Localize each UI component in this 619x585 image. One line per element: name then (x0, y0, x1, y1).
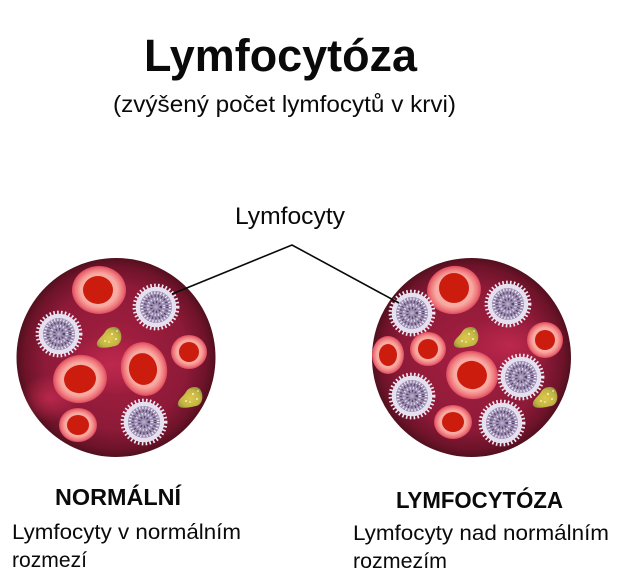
platelet (178, 387, 202, 408)
red blood cell (434, 405, 472, 439)
heading: normal: NORMÁLNÍ (55, 483, 182, 510)
lymphocyte (500, 356, 542, 398)
lymphocyte (135, 286, 177, 328)
red blood cell (171, 335, 207, 369)
red blood cell (116, 338, 172, 400)
pointer lines to lymphocytes (172, 245, 399, 303)
panel: normal blood circle (16, 258, 216, 457)
text block: lymphocytosis description: rozmezím (353, 550, 447, 573)
text block: normal description: Lymfocyty v normálním (12, 521, 241, 544)
red blood cell (49, 351, 111, 407)
red blood cell (441, 345, 503, 405)
platelet (533, 387, 557, 408)
label: Lymfocyty: Lymfocyty (235, 203, 345, 230)
heading: lymphocytosis: LYMFOCYTÓZA (396, 486, 563, 513)
lymphocyte (391, 375, 433, 417)
text block: lymphocytosis description: Lymfocyty nad normálním (353, 522, 609, 545)
title: Lymfocytóza (144, 30, 418, 81)
text block: normal description: rozmezí (12, 549, 87, 572)
panel: lymphocytosis blood circle (372, 258, 571, 457)
text block: lymphocytosis description (353, 522, 609, 573)
platelet (454, 327, 478, 348)
red blood cell (72, 266, 126, 314)
lymphocyte (391, 292, 433, 334)
platelet (97, 327, 121, 348)
red blood cell (410, 332, 446, 366)
lymphocyte (123, 401, 165, 443)
lymphocyte (38, 313, 80, 355)
red blood cell (372, 336, 404, 374)
lymphocyte (487, 283, 529, 325)
subtitle: (zvýšený počet lymfocytů v krvi) (113, 91, 456, 117)
text block: normal description (12, 521, 241, 572)
lymphocyte (481, 402, 523, 444)
red blood cell (423, 262, 485, 318)
red blood cell (59, 408, 97, 442)
red blood cell (527, 322, 563, 358)
